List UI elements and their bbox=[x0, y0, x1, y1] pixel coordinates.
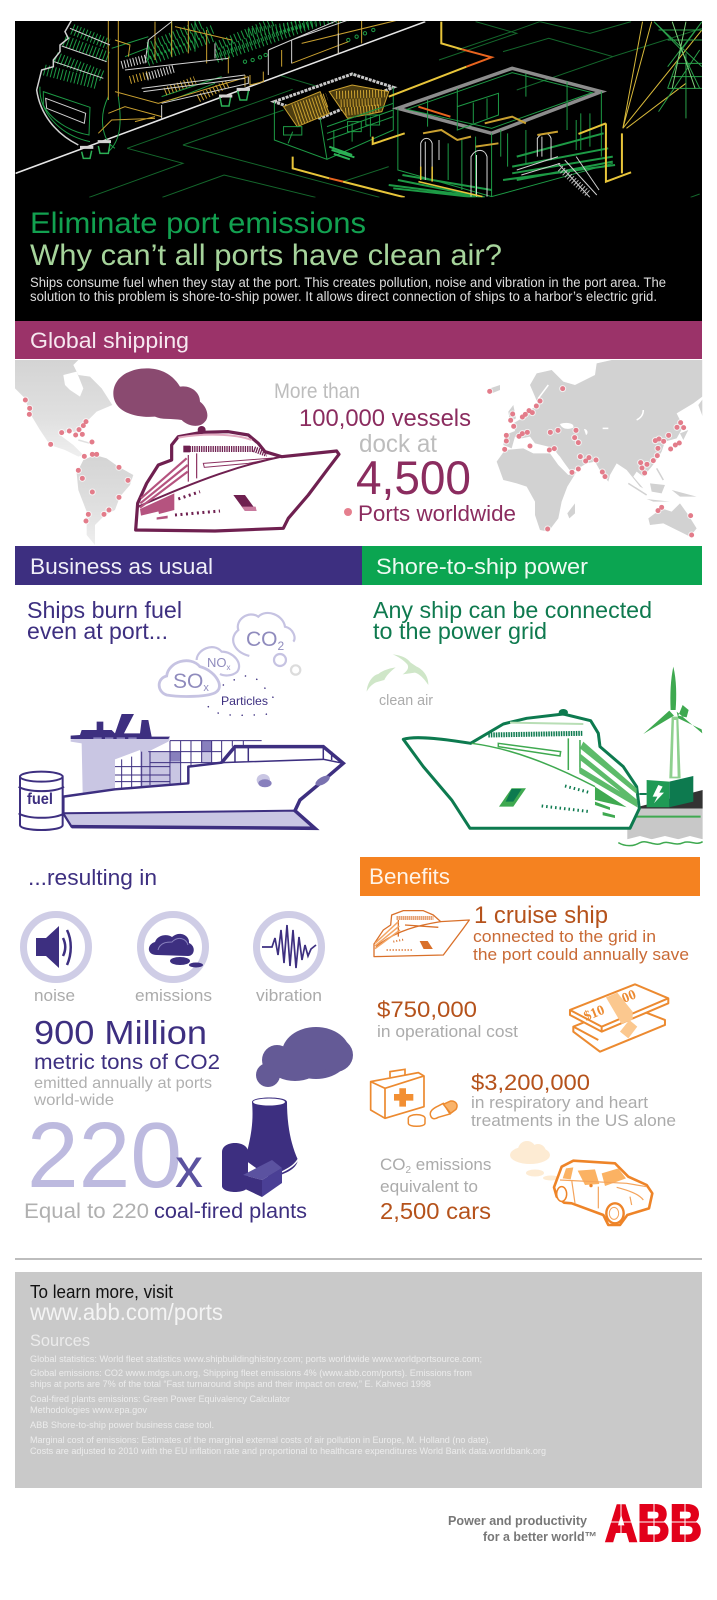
world map with port dots bbox=[15, 360, 703, 545]
right substation bbox=[389, 68, 615, 197]
text: operational cost: $750,000 bbox=[377, 997, 477, 1022]
text: sources: Sources bbox=[30, 1331, 90, 1350]
text: sources: Methodologies www.epa.gov bbox=[30, 1405, 148, 1415]
intro text: solution to this problem is shore-to-ship power. It allows direct connection of ships to a harbor’s electric grid. bbox=[30, 289, 657, 304]
panel: shore-to-ship power bbox=[362, 546, 703, 846]
icon: medical kit and pills bbox=[371, 1069, 457, 1126]
stat: vessels and ports: 100,000 vessels bbox=[299, 405, 471, 432]
labels: impact icons: emissions bbox=[135, 986, 212, 1005]
caption: equal to 220 coal-fired plants: coal-fired plants bbox=[154, 1200, 307, 1223]
icon: emissions bbox=[140, 914, 206, 980]
text: operational cost: in operational cost bbox=[377, 1022, 518, 1041]
text: healthcare saving bbox=[471, 1070, 676, 1130]
text: 1 cruise ship: 1 cruise ship bbox=[474, 902, 608, 929]
icon: dock and power box bbox=[627, 776, 703, 843]
heading band: shore-to-ship power: Shore-to-ship power bbox=[376, 554, 588, 579]
left substation bbox=[274, 74, 393, 159]
text: CO2 cars: 2,500 cars bbox=[380, 1198, 491, 1224]
text: sources: ABB Shore-to-ship power business case tool. bbox=[30, 1420, 214, 1430]
panel: business as usual bbox=[15, 546, 362, 830]
heading band: global shipping: Global shipping bbox=[30, 328, 189, 353]
heading: ships burn fuel bbox=[27, 597, 182, 644]
caption: equal to 220 coal-fired plants: Equal to 220 bbox=[24, 1200, 149, 1223]
heading: any ship can be connected bbox=[373, 597, 652, 644]
footer tagline bbox=[448, 1513, 597, 1544]
intro text bbox=[30, 275, 666, 304]
icon: smoke cloud bbox=[256, 1027, 353, 1087]
text: sources: ships at ports are 7% of the total “Fast turnaround ships and their impact on crew,” E. Kahveci 1998 bbox=[30, 1379, 431, 1389]
stat: 900 million: world-wide bbox=[33, 1092, 114, 1109]
text: sources: Global emissions: CO2 www.mdgs.un.org, Shipping fleet emissions 4% (www.abb.com/ports). Emissions from bbox=[30, 1368, 472, 1378]
footer tagline: for a better world™ bbox=[483, 1529, 597, 1544]
stat: 900 million bbox=[33, 1014, 220, 1109]
icon: exhaust cloud bbox=[510, 1141, 559, 1180]
call to action: learn more: www.abb.com/ports bbox=[29, 1299, 223, 1325]
footer tagline: Power and productivity bbox=[448, 1513, 588, 1528]
panel: resulting in bbox=[24, 865, 353, 1223]
stat: 220x: 220 bbox=[27, 1103, 182, 1207]
panel: header bbox=[15, 17, 702, 321]
heading: resulting in: ...resulting in bbox=[28, 865, 157, 890]
text: sources: Marginal cost of emissions: Estimates of the marginal external costs of air pollution in Europe, M. Holland (no date). bbox=[30, 1435, 491, 1445]
heading: any ship can be connected: to the power grid bbox=[373, 618, 547, 644]
text: CO2 cars: equivalent to bbox=[380, 1177, 478, 1196]
heading band: global shipping bbox=[15, 321, 702, 359]
emission clouds: x bbox=[203, 682, 209, 694]
emission clouds: 2 bbox=[278, 639, 284, 653]
icon: smoke cloud bbox=[113, 368, 207, 426]
icon: money stacks bbox=[570, 984, 668, 1052]
emission clouds bbox=[159, 613, 300, 715]
text: 1 cruise ship: connected to the grid in bbox=[473, 927, 656, 946]
text: healthcare saving: $3,200,000 bbox=[471, 1070, 590, 1095]
stat: vessels and ports: 4,500 bbox=[356, 451, 471, 504]
text: CO2 cars: emissions bbox=[411, 1155, 491, 1174]
text: CO2 cars: CO bbox=[380, 1155, 406, 1174]
heading band: business as usual: Business as usual bbox=[30, 554, 213, 579]
call to action: learn more: To learn more, visit bbox=[30, 1281, 173, 1302]
heading: ships burn fuel: even at port... bbox=[27, 618, 168, 644]
text: sources bbox=[30, 1331, 546, 1456]
stat: vessels and ports: More than bbox=[274, 380, 360, 403]
stat: vessels and ports: dock at bbox=[359, 430, 437, 458]
icon: money stacks: $10 bbox=[582, 1003, 607, 1025]
text: 1 cruise ship: the port could annually save bbox=[473, 945, 689, 964]
panel: sources bbox=[15, 1272, 702, 1488]
text: sources: Coal-fired plants emissions: Green Power Equivalency Calculator bbox=[30, 1394, 290, 1404]
emission clouds: Particles bbox=[221, 694, 268, 708]
heading band: business as usual bbox=[15, 546, 362, 585]
divider rule bbox=[15, 1258, 702, 1260]
stat: 220x: x bbox=[175, 1136, 203, 1199]
icon: cruise ship bbox=[136, 426, 339, 531]
text: sources: Costs are adjusted to 2010 with the EU inflation rate and proportional to healthcare expenditures World Bank data.worldbank.org bbox=[30, 1446, 546, 1456]
icon: cruise ship connected bbox=[403, 709, 639, 828]
heading band: benefits: Benefits bbox=[369, 864, 450, 889]
icon: money stacks: 00 bbox=[620, 988, 638, 1007]
emission clouds: SO bbox=[173, 670, 203, 693]
text: healthcare saving: in respiratory and heart bbox=[471, 1093, 648, 1112]
icon: coal plant bbox=[222, 1098, 299, 1197]
labels: impact icons bbox=[34, 986, 322, 1005]
labels: impact icons: noise bbox=[34, 986, 75, 1005]
title bbox=[30, 207, 502, 272]
icon: vibration bbox=[256, 914, 322, 980]
icon: small cruise ship bbox=[374, 911, 469, 957]
labels: impact icons: vibration bbox=[256, 986, 322, 1005]
text: CO2 cars: 2 bbox=[406, 1165, 412, 1176]
stat: 900 million: emitted annually at ports bbox=[34, 1075, 212, 1092]
icon: birds bbox=[367, 654, 428, 692]
text: operational cost bbox=[377, 997, 518, 1041]
icon: fuel barrel bbox=[19, 772, 64, 830]
icon: wind turbine bbox=[643, 667, 702, 778]
text: sources: Global statistics: World fleet statistics www.shipbuildinghistory.com; ports worldwide www.worldportsource.com; bbox=[30, 1354, 482, 1364]
text: healthcare saving: treatments in the US alone bbox=[471, 1111, 676, 1130]
logo: ABB: ABB bbox=[605, 1495, 702, 1553]
heading: ships burn fuel: Ships burn fuel bbox=[27, 597, 182, 623]
emission clouds: NO bbox=[207, 655, 226, 670]
panel: global shipping bbox=[15, 321, 703, 545]
stat: vessels and ports: Ports worldwide bbox=[358, 501, 516, 526]
icon: container ship bbox=[63, 714, 343, 828]
call to action: learn more bbox=[29, 1281, 223, 1325]
pylon bbox=[654, 22, 702, 118]
icon: car bbox=[554, 1161, 652, 1225]
icon: noise bbox=[24, 914, 88, 980]
waves bbox=[618, 842, 703, 846]
label: clean air: clean air bbox=[379, 692, 433, 709]
emission clouds: x bbox=[226, 663, 230, 672]
stat: 900 million: 900 Million bbox=[34, 1014, 207, 1051]
panel: benefits bbox=[360, 857, 700, 1225]
icon: fuel barrel: fuel bbox=[27, 791, 53, 808]
illustration: wireframe port grounds bbox=[16, 22, 702, 197]
text: 1 cruise ship bbox=[473, 902, 689, 964]
heading: any ship can be connected: Any ship can be connected bbox=[373, 597, 652, 623]
stat: 900 million: metric tons of CO2 bbox=[34, 1051, 220, 1074]
intro text: Ships consume fuel when they stay at the port. This creates pollution, noise and vibration in the port area. The bbox=[30, 275, 666, 290]
cables bbox=[293, 22, 702, 197]
title: Eliminate port emissions bbox=[30, 207, 366, 240]
emission clouds: CO bbox=[246, 628, 278, 651]
text: CO2 cars bbox=[380, 1155, 491, 1224]
illustration: wireframe ship bbox=[37, 17, 398, 158]
heading band: benefits bbox=[360, 857, 700, 896]
stat: vessels and ports bbox=[274, 380, 516, 526]
heading band: shore-to-ship power bbox=[362, 546, 702, 585]
caption: equal to 220 coal-fired plants bbox=[24, 1200, 307, 1223]
title: Why can’t all ports have clean air? bbox=[30, 239, 502, 272]
